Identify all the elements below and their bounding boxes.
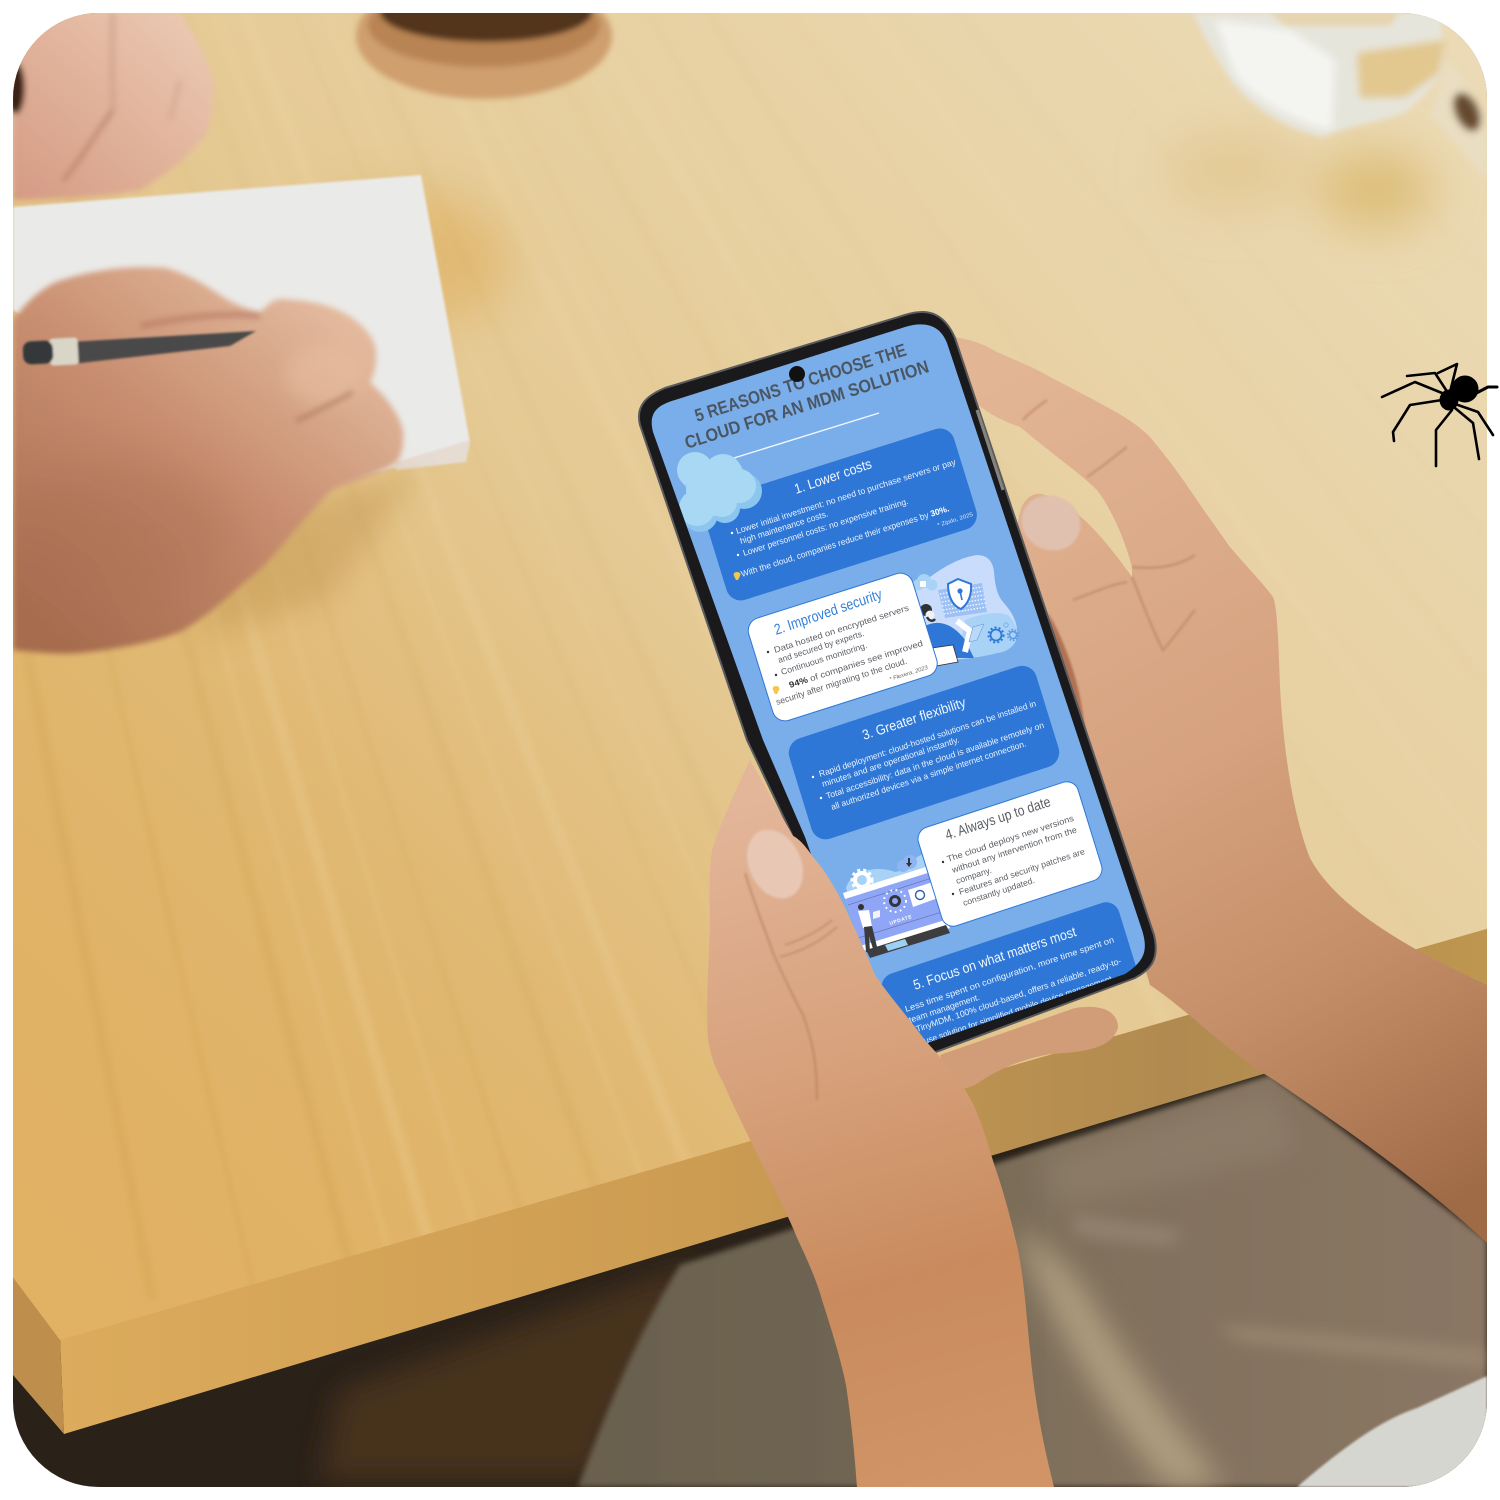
warm golden patch on table <box>366 174 522 338</box>
glass reflections on table <box>1165 130 1435 230</box>
glass of water <box>1193 13 1487 180</box>
panel: 5 focus on what matters most: team management. <box>908 992 981 1025</box>
panel: 5 focus on what matters most: TinyMDM, 100% cloud-based, offers a reliable, ready-to- <box>915 956 1122 1034</box>
arm and laptop <box>957 621 970 652</box>
update gear <box>890 896 900 906</box>
trousers <box>578 1075 1487 1487</box>
base platform <box>860 920 950 953</box>
panel: 5 focus on what matters most: Less time spent on configuration, more time spent on <box>904 934 1115 1014</box>
phone screen <box>652 324 1145 1044</box>
panel: 1 lower costs: high maintenance costs. <box>739 508 829 546</box>
panel: 4 always up to date: Features and security patches are <box>958 846 1086 897</box>
panel: 3 greater flexibility: Rapid deployment: cloud-hosted solutions can be installed in <box>818 698 1037 779</box>
icon: cloud <box>677 452 762 532</box>
panel: 1 lower costs: With the cloud, companies reduce their expenses by 30%. <box>740 503 950 579</box>
middle fingernail <box>1021 495 1081 552</box>
panel: 2 improved security: and secured by experts. <box>777 628 865 665</box>
panel: 1 lower costs: Lower personnel costs: no expensive training. <box>742 496 909 558</box>
panel: 5 focus on what matters most: use solution for simplified mobile device management. <box>923 973 1115 1046</box>
person body <box>925 623 974 658</box>
floor shadow under table <box>320 1260 700 1480</box>
illustration: data security <box>912 555 1018 666</box>
right hand and forearm <box>940 337 1487 1243</box>
table left edge <box>13 1278 64 1434</box>
left hand holding phone <box>707 760 1054 1487</box>
title: CLOUD FOR AN MDM SOLUTION <box>682 356 931 453</box>
writing hand <box>13 267 403 654</box>
panel: 2 improved security: 2. Improved security <box>772 586 884 639</box>
title: 5 REASONS TO CHOOSE THE <box>692 340 909 426</box>
thumb knuckle creases <box>780 920 837 957</box>
monitor with code <box>938 583 987 618</box>
panel: 3 greater flexibility: 3. Greater flexibility <box>860 694 967 743</box>
panel: 2 improved security: 94% of companies see improved <box>788 638 924 690</box>
panel: 4 always up to date: company. <box>955 865 993 886</box>
panel: 2 improved security: Data hosted on encrypted servers <box>773 603 910 655</box>
coaster and cup <box>356 0 612 99</box>
panel: 1 lower costs: 1. Lower costs <box>792 455 874 497</box>
panel: 5 focus on what matters most <box>878 898 1144 1074</box>
panel: 3 greater flexibility: Total accessibility: data in the cloud is available remotely on <box>825 720 1045 801</box>
thumbnail <box>736 820 814 908</box>
thumb contour <box>745 873 817 1100</box>
icon: spider <box>1382 364 1497 466</box>
illustration: software update <box>843 854 950 958</box>
update status card <box>908 882 938 907</box>
smartphone <box>638 311 1157 1053</box>
pen <box>22 331 256 366</box>
blob background <box>915 555 1017 660</box>
shadow below writing hand <box>200 470 420 640</box>
person with laptop <box>858 904 880 952</box>
gears <box>990 630 1002 640</box>
panel: 4 always up to date: 4. Always up to date <box>943 794 1053 844</box>
notebook <box>13 175 470 490</box>
panel: 1 lower costs: Lower initial investment: no need to purchase servers or pay <box>735 456 957 536</box>
lower fingertip under phone <box>940 1007 1118 1092</box>
download cloud <box>897 855 917 872</box>
panel: 5 focus on what matters most: 5. Focus on what matters most <box>911 923 1078 993</box>
icon: lightbulb <box>734 572 740 580</box>
panel: 3 greater flexibility: all authorized devices via a simple internet connection. <box>830 738 1027 812</box>
panel: 1 lower costs <box>700 425 981 604</box>
panel: 2 improved security: Continuous monitoring. <box>780 640 868 677</box>
front camera <box>789 366 805 382</box>
shield <box>948 579 971 609</box>
table front edge <box>60 925 1487 1434</box>
panel: 2 improved security <box>745 570 940 724</box>
panel: 4 always up to date: without any intervention from the <box>950 824 1078 875</box>
panel: 3 greater flexibility: minutes and are operational instantly. <box>821 734 960 789</box>
icon: lightbulb <box>773 686 779 694</box>
white cloth <box>1297 1376 1487 1487</box>
panel: 1 lower costs: * Zipdo, 2025 <box>937 512 974 529</box>
panel: 4 always up to date: The cloud deploys new versions <box>946 813 1075 864</box>
cloud with lock <box>912 574 938 590</box>
chair <box>932 645 958 666</box>
finger contours <box>1023 400 1195 650</box>
upper left hand <box>7 13 214 200</box>
panel: 4 always up to date <box>915 779 1105 929</box>
illustration: software update: UPDATE <box>889 914 913 927</box>
shaded finger beside phone <box>1048 614 1086 726</box>
panel: 2 improved security: * Flexera, 2023 <box>889 665 930 683</box>
person head <box>920 604 932 616</box>
title underline <box>734 413 879 458</box>
panel: 4 always up to date: constantly updated. <box>962 875 1036 908</box>
panel: 3 greater flexibility <box>785 662 1063 843</box>
panel: 2 improved security: security after migrating to the cloud. <box>775 656 908 707</box>
phone body <box>639 312 1156 1090</box>
side button <box>977 410 1003 490</box>
